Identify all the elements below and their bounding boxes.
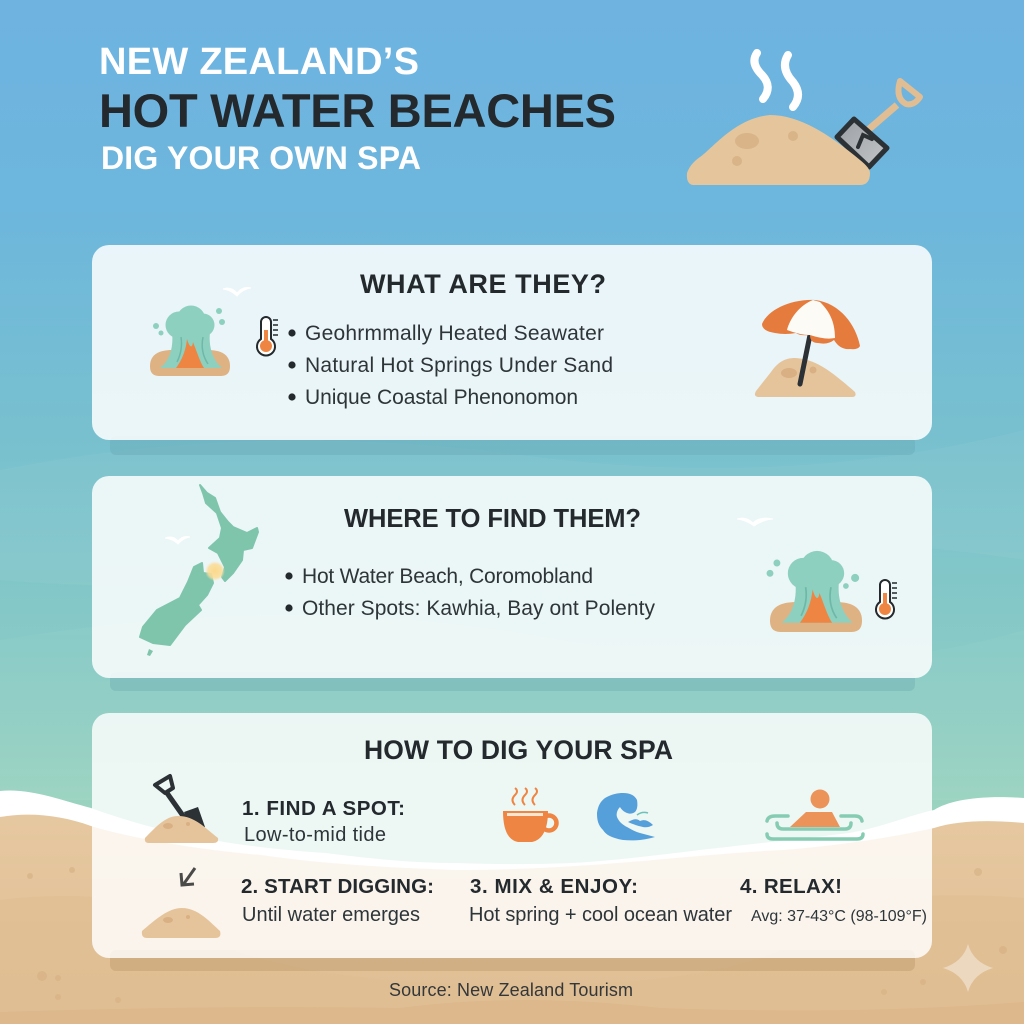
step 4 text: Avg: 37-43°C (98-109°F) (751, 908, 927, 925)
icon: digging arrow (181, 868, 195, 885)
background: soft sea waves (0, 430, 1024, 800)
icon: geyser (150, 306, 230, 376)
step 3 text (469, 875, 732, 926)
step 2 text: 2. START DIGGING: (241, 875, 434, 898)
icon: seagull (223, 288, 251, 296)
title block (99, 41, 616, 176)
icon: coffee cup (503, 788, 556, 842)
icon: sand mound (142, 908, 220, 938)
step 4 text: 4. RELAX! (740, 875, 842, 898)
map marker: Coromandel glow (205, 561, 225, 581)
source line: Source: New Zealand Tourism (389, 980, 633, 1000)
icon: ocean wave (597, 793, 655, 840)
panel shadow: bottom (110, 950, 915, 971)
icon: geyser large (767, 551, 862, 632)
heading: what are they: WHAT ARE THEY? (360, 269, 606, 299)
step 3 text: 3. MIX & ENJOY: (470, 875, 638, 898)
background: sand and foam shore (0, 791, 1024, 1024)
icon: seagull (737, 518, 773, 526)
step 2 text: Until water emerges (242, 904, 420, 926)
panel: what are they (92, 245, 932, 440)
panel: where to find them (92, 476, 932, 678)
step 1 text (242, 797, 405, 846)
icon: beach umbrella (755, 300, 860, 397)
bullet list: what are they: Geohrmmally Heated Seawater (305, 322, 604, 345)
icon: sparkle (943, 944, 993, 992)
panel: how to dig your spa (92, 713, 932, 958)
icon: shovel in sand (145, 776, 218, 843)
step 2 text (241, 875, 434, 926)
step 4 text (740, 875, 927, 925)
map: New Zealand (140, 485, 258, 656)
title line: Hot Water Beaches: HOT WATER BEACHES (99, 84, 616, 137)
step 3 text: Hot spring + cool ocean water (469, 904, 732, 926)
bullet list: where to find them (285, 565, 656, 620)
step 1 text: Low-to-mid tide (244, 824, 386, 846)
heading: how to dig your spa: HOW TO DIG YOUR SPA (364, 735, 673, 765)
bullet list: what are they: Natural Hot Springs Under Sand (305, 354, 613, 377)
bullet list: what are they: Unique Coastal Phenonomon (305, 386, 578, 409)
subtitle: DIG YOUR OWN SPA (101, 140, 421, 176)
bullet list: where to find them: Hot Water Beach, Coromobland (302, 565, 593, 588)
icon: thermometer (257, 317, 278, 355)
heading: where to find them: WHERE TO FIND THEM? (344, 505, 641, 533)
icon: person relaxing in tub (767, 790, 863, 839)
step 1 text: 1. FIND A SPOT: (242, 797, 405, 820)
icon: sand pile with shovel and steam (687, 53, 920, 185)
bullet list: where to find them: Other Spots: Kawhia, Bay ont Polenty (302, 597, 656, 620)
icon: seagull (165, 536, 190, 544)
panel shadow strips (110, 436, 915, 691)
title line: New Zealand's: NEW ZEALAND’S (99, 41, 419, 83)
bullet list: what are they (288, 322, 613, 409)
icon: thermometer (876, 580, 897, 618)
